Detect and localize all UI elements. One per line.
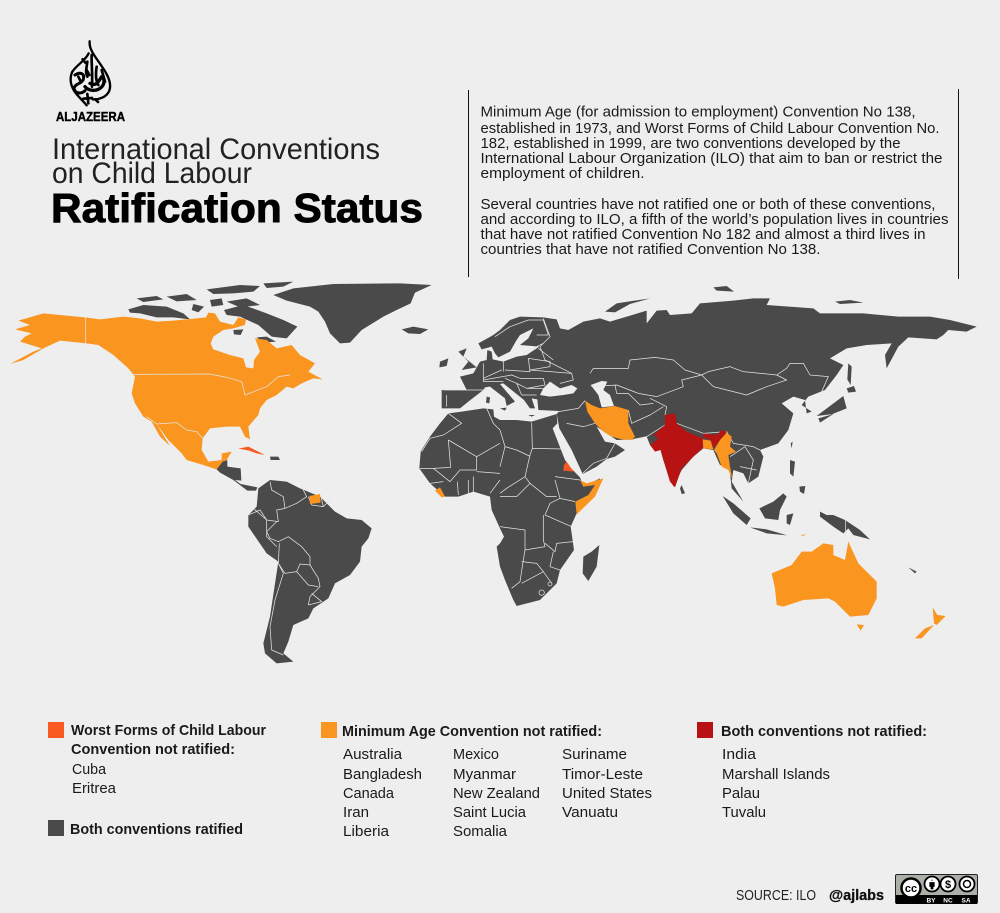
Country borders: [420, 318, 846, 595]
legend: minimum age not ratified: Minimum Age Convention not ratified:: [342, 723, 602, 740]
intro text panel: that have not ratified Convention No 182 and almost a third lives in: [480, 227, 926, 243]
legend: worst forms not ratified: Convention not ratified:: [71, 741, 235, 758]
Greenland and Arctic islands: [128, 282, 432, 343]
title: on Child Labour: [52, 157, 252, 190]
Madagascar: [583, 545, 599, 581]
Somalia: [575, 478, 603, 514]
intro text panel: countries that have not ratified Convention No 138.: [480, 242, 820, 258]
legend: minimum age not ratified: Liberia: [343, 823, 390, 840]
ajlabs handle: @ajlabs: [829, 887, 884, 904]
legend: minimum age not ratified: [321, 722, 652, 840]
legend: worst forms not ratified: Eritrea: [72, 780, 117, 797]
legend: both ratified: Both conventions ratified: [70, 821, 243, 838]
legend: both not ratified: Both conventions not ratified:: [721, 723, 927, 740]
legend: minimum age not ratified: Somalia: [453, 823, 508, 840]
Seas: [540, 381, 614, 407]
legend: worst forms not ratified: [48, 722, 266, 797]
legend: minimum age not ratified: New Zealand: [453, 785, 540, 802]
logo wordmark: ALJAZEERA: [56, 109, 126, 124]
Canada, United States, Mexico: [10, 313, 323, 470]
India: [650, 413, 727, 487]
icon: Creative Commons BY-NC-SA badge: BY: [926, 898, 936, 904]
intro text panel: employment of children.: [480, 166, 644, 182]
Bangladesh: [703, 439, 713, 449]
Africa: [419, 408, 600, 606]
intro text panel: Minimum Age (for admission to employment) Convention No 138,: [480, 104, 916, 120]
intro text panel: International Labour Organization (ILO) that aim to ban or restrict the: [480, 151, 942, 167]
title: [51, 133, 423, 231]
legend: minimum age not ratified: Suriname: [562, 746, 627, 763]
Eritrea: [563, 462, 580, 476]
title: International Conventions: [52, 133, 380, 166]
map: Europe, Asia, Africa and Oceania: [419, 286, 977, 638]
Australia: [772, 542, 877, 617]
Tasmania: [857, 624, 864, 631]
Central America: [217, 460, 257, 491]
legend: both not ratified: Palau: [722, 785, 760, 802]
legend: both not ratified: [697, 722, 927, 821]
Caribbean islands: [270, 457, 280, 460]
icon: Creative Commons BY-NC-SA badge: NC: [943, 898, 953, 904]
Timor-Leste: [802, 534, 807, 536]
map: Americas and Greenland: [10, 282, 432, 663]
Liberia: [435, 487, 445, 497]
legend: minimum age not ratified: Canada: [343, 785, 395, 802]
Eurasia: [442, 298, 977, 502]
legend: worst forms not ratified: Worst Forms of Child Labour: [71, 722, 266, 739]
intro text panel: and according to ILO, a fifth of the world’s population lives in countries: [480, 212, 948, 228]
Cuba: [238, 447, 265, 455]
title: Ratification Status: [51, 185, 423, 231]
world map: [10, 282, 977, 663]
icon: Creative Commons BY-NC-SA badge: $: [945, 879, 951, 891]
legend: minimum age not ratified: Bangladesh: [343, 766, 422, 783]
legend: minimum age not ratified: Vanuatu: [562, 804, 618, 821]
Myanmar: [714, 433, 736, 480]
logo: Al Jazeera: [56, 41, 126, 124]
icon: Creative Commons BY-NC-SA badge: SA: [961, 898, 971, 904]
legend: minimum age not ratified: Iran: [343, 804, 369, 821]
intro text panel: established in 1973, and Worst Forms of Child Labour Convention No.: [480, 121, 940, 137]
legend: minimum age not ratified: Timor-Leste: [562, 766, 643, 783]
intro text panel: 182, established in 1999, are two conventions developed by the: [480, 136, 900, 152]
intro text panel: Several countries have not ratified one or both of these conventions,: [480, 197, 936, 213]
legend: both not ratified: Marshall Islands: [722, 766, 830, 783]
Eurasia islands: [439, 286, 917, 573]
legend: minimum age not ratified: Mexico: [453, 746, 499, 763]
legend: worst forms not ratified: Cuba: [72, 761, 107, 778]
legend: both not ratified: Tuvalu: [722, 804, 766, 821]
Suriname: [309, 494, 321, 504]
South America borders: [248, 482, 330, 655]
Iran: [585, 401, 635, 440]
legend: minimum age not ratified: Myanmar: [453, 766, 516, 783]
intro text panel: [468, 89, 959, 279]
icon: Creative Commons BY-NC-SA badge: [896, 874, 978, 904]
legend: minimum age not ratified: United States: [562, 785, 652, 802]
icon: Creative Commons BY-NC-SA badge: cc: [905, 883, 917, 895]
United States and Canada borders: [86, 317, 290, 438]
legend: minimum age not ratified: Australia: [343, 746, 403, 763]
South America: [248, 480, 372, 663]
legend: minimum age not ratified: Saint Lucia: [453, 804, 527, 821]
New Zealand: [915, 607, 946, 638]
legend: both not ratified: India: [722, 746, 757, 763]
source credit: SOURCE: ILO: [736, 888, 816, 904]
